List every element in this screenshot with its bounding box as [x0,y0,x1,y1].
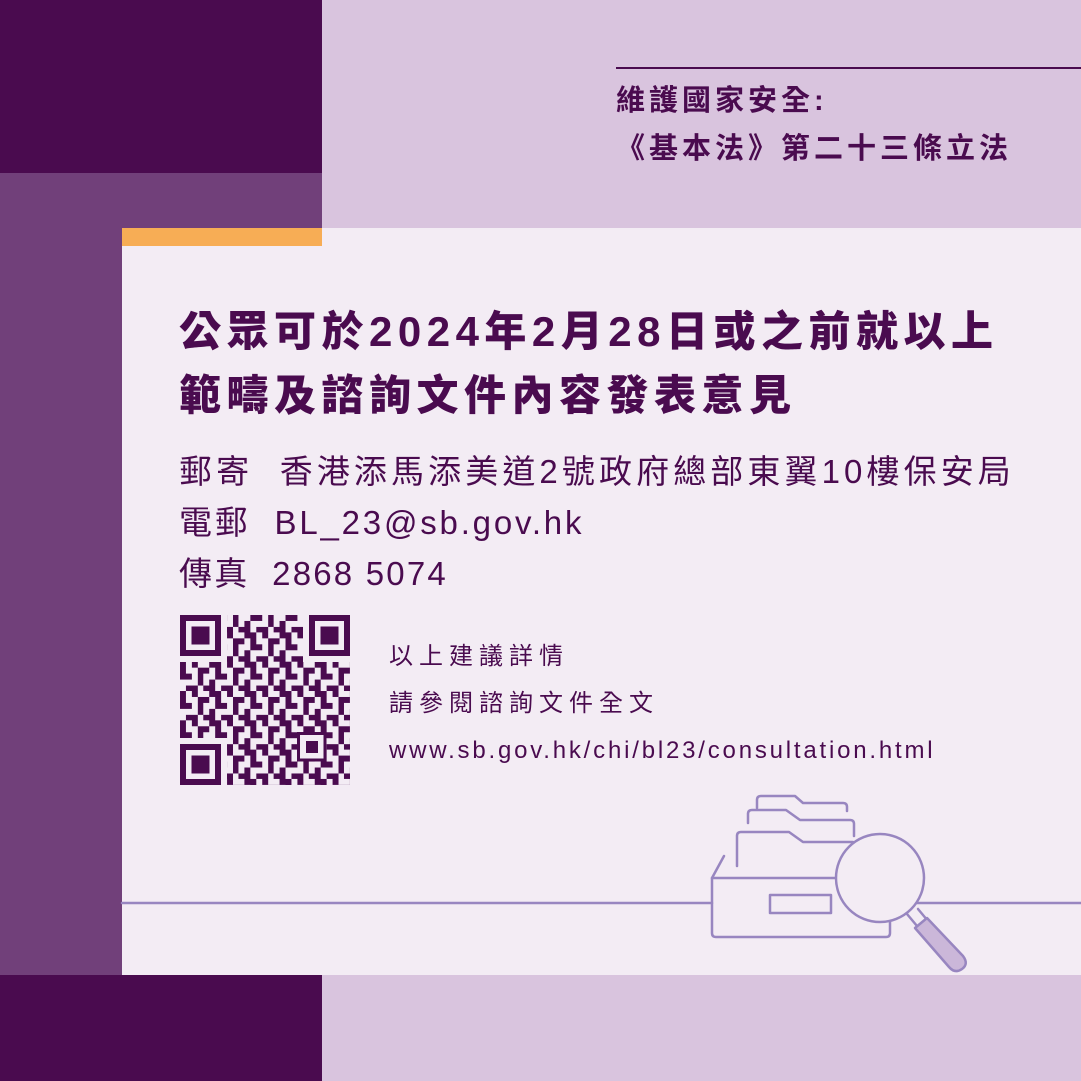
medium purple band [0,173,322,228]
headline [179,308,999,419]
more info text: 以上建議詳情 [389,643,569,670]
orange accent bar [122,228,322,246]
more info text: www.sb.gov.hk/chi/bl23/consultation.html [389,737,935,764]
contact details: 電郵 BL_23@sb.gov.hk [179,504,584,541]
headline: 公眾可於2024年2月28日或之前就以上 [179,308,999,355]
title block [616,67,1081,165]
left strip [0,228,122,975]
dark block top-left [0,0,322,173]
title block: 《基本法》第二十三條立法 [616,133,1012,165]
dark block bottom-left [0,975,322,1081]
QR code [180,615,350,785]
headline: 範疇及諮詢文件內容發表意見 [179,372,797,419]
contact details: 郵寄 香港添馬添美道2號政府總部東翼10樓保安局 [179,453,1015,490]
more info text [389,643,935,764]
contact details [179,453,1015,592]
more info text: 請參閱諮詢文件全文 [389,690,659,717]
main card [122,228,1081,975]
title block: 維護國家安全: [616,85,828,117]
contact details: 傳真 2868 5074 [179,555,448,592]
